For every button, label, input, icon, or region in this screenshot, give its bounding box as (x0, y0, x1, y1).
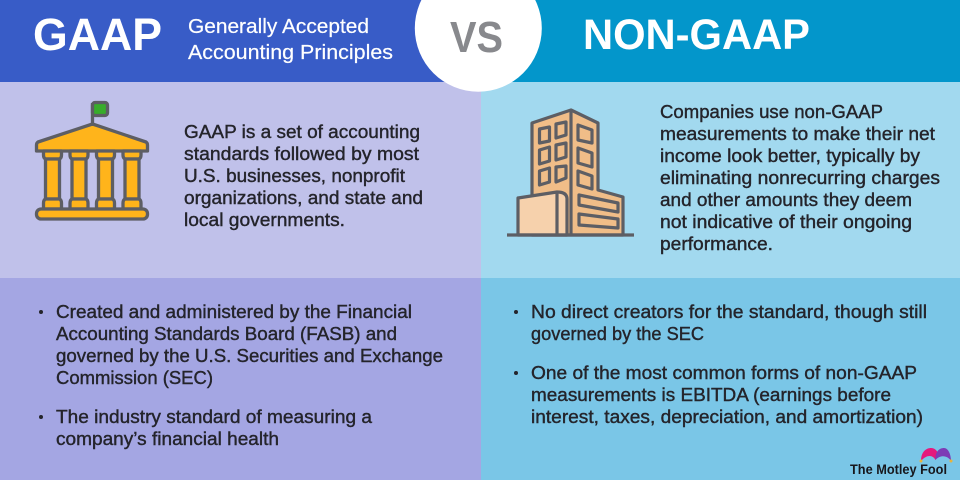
list: GAAP facts: The industry standard of measuring a (56, 406, 373, 427)
icon: government building with flag (36, 102, 148, 219)
text: GAAP definition: standards followed by most (184, 143, 419, 164)
icon: office building (507, 110, 634, 235)
panel: GAAP header band (0, 0, 481, 82)
text: GAAP definition: local governments. (184, 209, 345, 230)
subheading: Generally Accepted Accounting Principles (188, 15, 393, 64)
text: non-GAAP definition: and other amounts they deem (660, 189, 912, 210)
text: GAAP definition (184, 121, 423, 230)
heading: GAAP: GAAP (33, 9, 162, 60)
text: GAAP definition: U.S. businesses, nonprofit (184, 165, 405, 186)
text: GAAP definition: organizations, and state and (184, 187, 423, 208)
text: non-GAAP definition: measurements to make their net (660, 123, 935, 144)
text: GAAP definition: GAAP is a set of accounting (184, 121, 420, 142)
panel: GAAP definition background (0, 82, 481, 278)
list: GAAP facts: Accounting Standards Board (FASB) and (56, 323, 397, 344)
panel: non-GAAP definition background (481, 82, 960, 278)
list: non-GAAP facts: One of the most common forms of non-GAAP (531, 362, 917, 383)
subheading: Generally Accepted Accounting Principles: Accounting Principles (188, 41, 393, 64)
text: non-GAAP definition (660, 101, 940, 254)
subheading: Generally Accepted Accounting Principles: Generally Accepted (188, 15, 369, 38)
VS badge: VS (450, 14, 503, 62)
VS badge (415, 0, 542, 92)
panel: non-GAAP facts background (481, 278, 960, 480)
list: GAAP facts: company’s financial health (56, 428, 279, 449)
panel: GAAP facts background (0, 278, 481, 480)
text: non-GAAP definition: Companies use non-GAAP (660, 101, 883, 122)
text: non-GAAP definition: eliminating nonrecurring charges (660, 167, 940, 188)
heading: NON-GAAP: NON-GAAP (583, 11, 810, 59)
list: non-GAAP facts: governed by the SEC (531, 323, 704, 344)
list: non-GAAP facts: measurements is EBITDA (earnings before (531, 384, 891, 405)
list: GAAP facts: Commission (SEC) (56, 367, 213, 388)
logo: The Motley Fool (850, 448, 952, 477)
list: non-GAAP facts: No direct creators for the standard, though still (531, 301, 927, 322)
text: non-GAAP definition: performance. (660, 233, 773, 254)
panel: non-GAAP header band (481, 0, 960, 82)
list: non-GAAP facts: interest, taxes, depreciation, and amortization) (531, 406, 923, 427)
list: GAAP facts (39, 301, 443, 449)
logo: The Motley Fool: The Motley Fool (850, 462, 947, 477)
list: GAAP facts: governed by the U.S. Securities and Exchange (56, 345, 443, 366)
text: non-GAAP definition: income look better, typically by (660, 145, 921, 166)
list: non-GAAP facts (514, 301, 927, 427)
text: non-GAAP definition: not indicative of their ongoing (660, 211, 912, 232)
list: GAAP facts: Created and administered by the Financial (56, 301, 412, 322)
